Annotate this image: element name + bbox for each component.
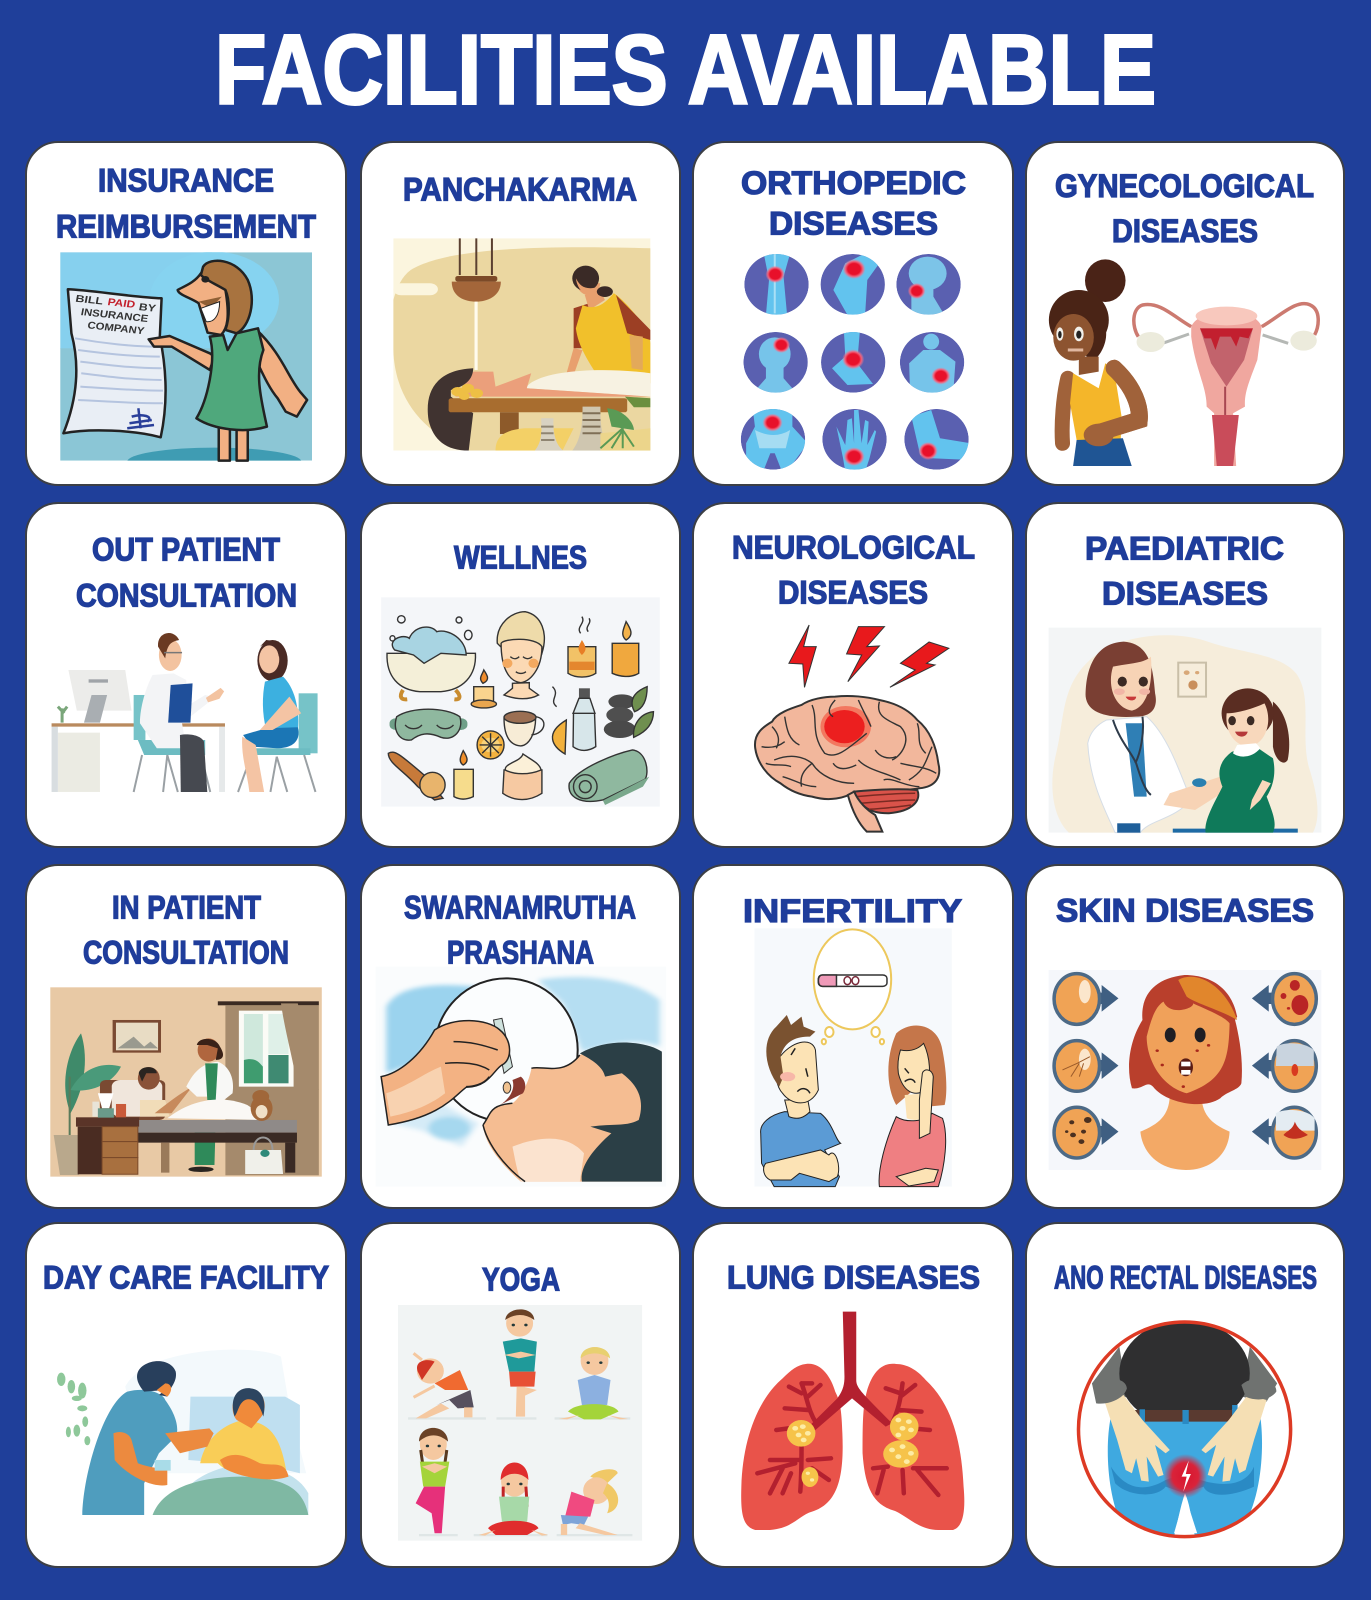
illustration: hand giving drops to child bbox=[376, 967, 666, 1187]
heading: in patient consultation: CONSULTATION bbox=[83, 934, 289, 970]
heading: orthopedic diseases bbox=[741, 165, 966, 242]
panel: neurological diseases bbox=[693, 503, 1013, 847]
heading: swarnamrutha prashana: SWARNAMRUTHA bbox=[404, 890, 636, 926]
panel: wellness bbox=[361, 503, 680, 847]
panel: skin diseases bbox=[1026, 865, 1344, 1208]
heading: panchakarma: PANCHAKARMA bbox=[403, 172, 637, 208]
heading: gynecological diseases: GYNECOLOGICAL bbox=[1055, 168, 1314, 204]
panel: infertility bbox=[693, 865, 1013, 1208]
heading: insurance reimbursement bbox=[56, 162, 316, 244]
heading: gynecological diseases bbox=[1055, 168, 1314, 249]
illustration: doctor examining child bbox=[1049, 628, 1321, 833]
panel: gynecological diseases bbox=[1026, 142, 1344, 485]
heading: swarnamrutha prashana bbox=[404, 890, 636, 970]
panel: insurance reimbursement bbox=[26, 142, 346, 485]
illustration: shirodhara oil treatment bbox=[393, 238, 650, 451]
panel: out patient consultation bbox=[26, 503, 346, 847]
heading: paediatric diseases: DISEASES bbox=[1102, 576, 1268, 612]
illustration: person with rectal pain in red circle bbox=[1078, 1320, 1291, 1537]
illustration: man holding paid bill: BY bbox=[138, 301, 157, 314]
illustration: couple with pregnancy test thought bubble bbox=[754, 928, 952, 1187]
panel: orthopedic diseases bbox=[693, 142, 1013, 485]
illustration: six children doing yoga poses bbox=[398, 1305, 642, 1541]
illustration: man holding paid bill: PAID bbox=[107, 296, 137, 310]
heading: insurance reimbursement: INSURANCE bbox=[98, 162, 274, 198]
illustration: man holding paid bill: COMPANY bbox=[87, 319, 145, 337]
heading: out patient consultation: CONSULTATION bbox=[76, 578, 297, 614]
panel: paediatric diseases bbox=[1026, 503, 1344, 847]
panel: lung diseases bbox=[693, 1223, 1013, 1567]
illustration: face with skin condition callouts bbox=[1049, 970, 1321, 1170]
panel: in patient consultation bbox=[26, 865, 346, 1208]
heading: infertility: INFERTILITY bbox=[743, 893, 962, 929]
heading: in patient consultation: IN PATIENT bbox=[112, 890, 261, 926]
heading: out patient consultation: OUT PATIENT bbox=[92, 532, 280, 568]
heading: paediatric diseases bbox=[1085, 530, 1284, 612]
illustration: spa and wellness items bbox=[381, 597, 660, 807]
panel: day care facility bbox=[26, 1223, 346, 1567]
illustration: lungs with tumours bbox=[741, 1312, 964, 1530]
panel: ano rectal diseases bbox=[1026, 1223, 1344, 1567]
heading: yoga: YOGA bbox=[482, 1262, 560, 1298]
heading: orthopedic diseases: ORTHOPEDIC bbox=[741, 165, 966, 201]
heading: out patient consultation bbox=[76, 532, 297, 614]
illustration: nine joint pain circles bbox=[741, 253, 971, 472]
illustration: brain with red focus and lightning bbox=[755, 625, 949, 832]
heading: in patient consultation bbox=[83, 890, 289, 970]
heading: wellnes: WELLNES bbox=[454, 540, 587, 576]
heading: neurological diseases bbox=[732, 530, 975, 610]
panel: swarnamrutha prashana bbox=[361, 865, 680, 1208]
panel: yoga bbox=[361, 1223, 680, 1567]
heading: neurological diseases: NEUROLOGICAL bbox=[732, 530, 975, 566]
title: FACILITIES AVAILABLE bbox=[215, 14, 1156, 124]
illustration: man holding paid bill: BILL bbox=[75, 292, 104, 307]
heading: gynecological diseases: DISEASES bbox=[1112, 213, 1258, 249]
illustration: man holding paid bill bbox=[60, 252, 312, 476]
heading: day care facility: DAY CARE FACILITY bbox=[43, 1260, 329, 1296]
heading: insurance reimbursement: REIMBURSEMENT bbox=[56, 208, 316, 244]
illustration: hospital room with patient bbox=[50, 987, 322, 1177]
heading: lung diseases: LUNG DISEASES bbox=[727, 1260, 980, 1296]
heading: neurological diseases: DISEASES bbox=[778, 574, 928, 610]
panel: panchakarma bbox=[361, 142, 680, 485]
illustration: woman with abdominal pain and uterus bbox=[1049, 259, 1318, 466]
illustration: nurse helping patient in bed bbox=[57, 1350, 308, 1515]
heading: skin diseases: SKIN DISEASES bbox=[1056, 892, 1314, 928]
heading: orthopedic diseases: DISEASES bbox=[769, 206, 938, 242]
illustration: doctor and patient at desk bbox=[52, 633, 318, 792]
illustration: man holding paid bill: INSURANCE bbox=[80, 306, 149, 325]
heading: swarnamrutha prashana: PRASHANA bbox=[447, 934, 594, 970]
heading: paediatric diseases: PAEDIATRIC bbox=[1085, 530, 1284, 566]
